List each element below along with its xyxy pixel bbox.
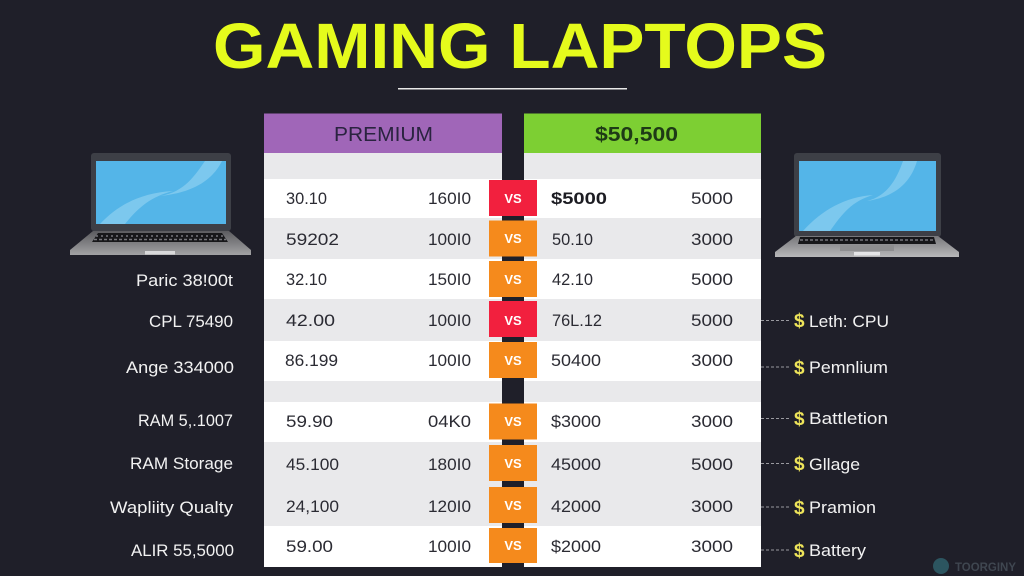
budget values: 3000 — [691, 497, 733, 516]
panel: budget column — [524, 114, 761, 567]
premium values: 100I0 — [428, 351, 471, 370]
left spec labels: RAM Storage — [130, 454, 233, 473]
left spec labels: Ange 334000 — [126, 358, 234, 377]
right spec callouts: Leth: CPU — [809, 312, 889, 331]
budget values: 45000 — [551, 455, 601, 474]
budget values: 3000 — [691, 537, 733, 556]
premium values: 86.199 — [285, 351, 338, 370]
right spec callouts: $ — [794, 454, 805, 475]
budget values: 3000 — [691, 351, 733, 370]
VS badges: VS — [504, 456, 522, 471]
VS badges: VS — [504, 231, 522, 246]
VS badges: VS — [504, 353, 522, 368]
left spec labels: CPL 75490 — [149, 312, 233, 331]
VS badges — [489, 180, 537, 563]
budget values: $3000 — [551, 412, 601, 431]
premium values: 32.10 — [286, 270, 327, 289]
right spec callouts — [761, 311, 889, 562]
left spec labels: Wapliity Qualty — [110, 498, 234, 517]
budget values: 5000 — [691, 311, 733, 330]
premium values: 100I0 — [428, 230, 471, 249]
right spec callouts: $ — [794, 498, 805, 519]
VS badges: VS — [504, 191, 522, 206]
left spec labels: Paric 38!00t — [136, 271, 233, 290]
right spec callouts: Battletion — [809, 409, 888, 428]
watermark — [933, 558, 1016, 574]
icon: left laptop — [70, 153, 251, 255]
budget values: 5000 — [691, 270, 733, 289]
budget values: $5000 — [551, 189, 607, 208]
budget values: 50400 — [551, 351, 601, 370]
VS badges: VS — [504, 538, 522, 553]
premium values — [285, 189, 471, 556]
budget header — [524, 114, 761, 153]
premium values: 100I0 — [428, 537, 471, 556]
budget values: 5000 — [691, 189, 733, 208]
budget values — [551, 189, 733, 556]
budget values: 3000 — [691, 230, 733, 249]
right spec callouts: Pramion — [809, 498, 876, 517]
right spec callouts: $ — [794, 541, 805, 562]
right spec callouts: $ — [794, 311, 805, 332]
budget values: 50.10 — [552, 230, 593, 249]
right spec callouts: Battery — [809, 541, 867, 560]
budget values: 76L.12 — [552, 311, 602, 330]
VS badges: VS — [504, 498, 522, 513]
watermark: TOORGINY — [955, 560, 1016, 574]
premium values: 42.00 — [286, 311, 335, 330]
panel: premium column — [264, 114, 502, 567]
VS badges: VS — [504, 414, 522, 429]
premium values: 160I0 — [428, 189, 471, 208]
premium header — [264, 114, 502, 153]
budget header: $50,500 — [595, 124, 678, 146]
premium values: 180I0 — [428, 455, 471, 474]
premium values: 59.00 — [286, 537, 333, 556]
premium values: 59202 — [286, 230, 339, 249]
right spec callouts: Gllage — [809, 455, 860, 474]
budget values: $2000 — [551, 537, 601, 556]
right spec callouts: Pemnlium — [809, 358, 888, 377]
premium values: 30.10 — [286, 189, 327, 208]
premium values: 100I0 — [428, 311, 471, 330]
budget values: 5000 — [691, 455, 733, 474]
budget values: 42.10 — [552, 270, 593, 289]
right spec callouts: $ — [794, 358, 805, 379]
left spec labels — [110, 271, 234, 560]
premium values: 04K0 — [428, 412, 471, 431]
VS badges: VS — [504, 272, 522, 287]
right spec callouts: $ — [794, 409, 805, 430]
premium values: 59.90 — [286, 412, 333, 431]
premium values: 120I0 — [428, 497, 471, 516]
left spec labels: RAM 5,.1007 — [138, 411, 233, 430]
VS badges: VS — [504, 313, 522, 328]
premium values: 150I0 — [428, 270, 471, 289]
budget values: 3000 — [691, 412, 733, 431]
premium header: PREMIUM — [334, 124, 433, 146]
premium values: 24,100 — [286, 497, 339, 516]
budget values: 42000 — [551, 497, 601, 516]
premium values: 45.100 — [286, 455, 339, 474]
icon: right laptop — [775, 153, 959, 257]
left spec labels: ALIR 55,5000 — [131, 541, 234, 560]
title: GAMING LAPTOPS — [213, 10, 827, 82]
